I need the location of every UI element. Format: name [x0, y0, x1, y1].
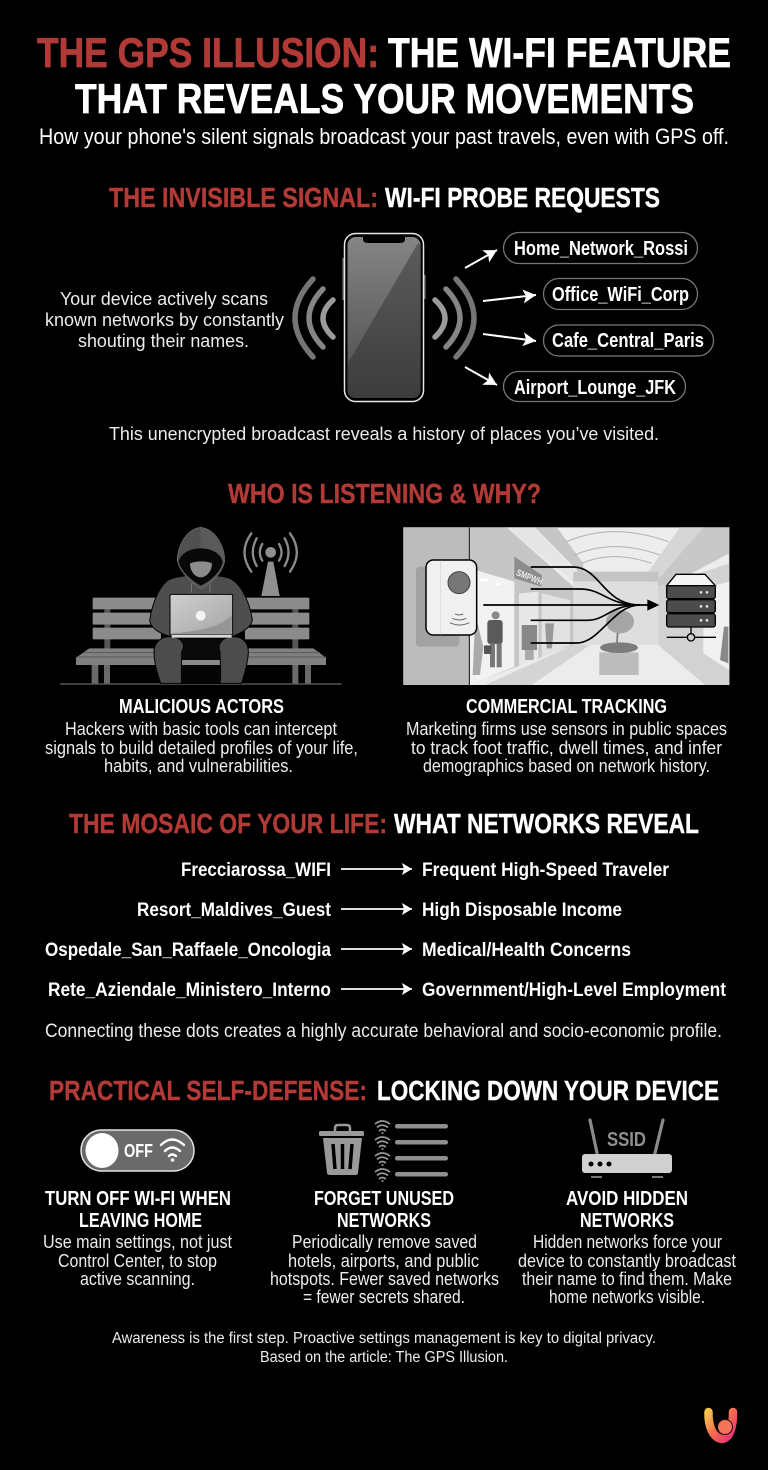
block: malicious actors: signals to build detailed profiles of your life,	[45, 738, 358, 758]
block: turn off wi-fi: Control Center, to stop	[58, 1251, 217, 1271]
pill: Airport_Lounge_JFK	[504, 372, 686, 402]
heading: who is listening: WHO IS LISTENING & WHY?	[228, 478, 541, 509]
block: forget unused networks: FORGET UNUSED	[314, 1188, 454, 1210]
footer	[112, 1330, 656, 1366]
block: commercial tracking: demographics based on network history.	[423, 756, 710, 776]
icon: smartphone	[342, 234, 426, 402]
heading: the invisible signal: WI-FI PROBE REQUESTS	[385, 182, 660, 213]
arrow: to Airport_Lounge_JFK	[465, 367, 497, 385]
row: Rete Aziendale mapping: Government/High-Level Employment	[422, 980, 727, 1001]
icon: signal waves right	[435, 279, 474, 357]
block: avoid hidden networks: Hidden networks force your	[533, 1232, 722, 1252]
title	[37, 29, 731, 122]
pill: Cafe_Central_Paris: Cafe_Central_Paris	[552, 330, 704, 352]
row: Ospedale mapping: Medical/Health Concerns	[422, 940, 631, 961]
block: malicious actors: habits, and vulnerabilities.	[104, 756, 293, 776]
block: turn off wi-fi: Use main settings, not just	[43, 1232, 232, 1252]
row: Rete Aziendale mapping	[48, 980, 727, 1001]
arrow: to Office_WiFi_Corp	[483, 295, 536, 301]
text: unencrypted broadcast note: This unencrypted broadcast reveals a history of places you’ve visited.	[109, 424, 659, 444]
block: turn off wi-fi	[43, 1188, 232, 1289]
pill: Office_WiFi_Corp: Office_WiFi_Corp	[552, 284, 689, 306]
row: Frecciarossa mapping: Frequent High-Speed Traveler	[422, 860, 670, 881]
row: Ospedale mapping	[45, 940, 631, 961]
pill: Office_WiFi_Corp	[544, 278, 698, 310]
pill: Airport_Lounge_JFK: Airport_Lounge_JFK	[514, 377, 676, 399]
block: malicious actors: Hackers with basic tools can intercept	[65, 719, 337, 739]
icon: trash can with network list	[319, 1121, 448, 1182]
block: forget unused networks: NETWORKS	[337, 1210, 431, 1232]
title: THE GPS ILLUSION:	[37, 29, 379, 76]
block: avoid hidden networks: home networks visible.	[549, 1287, 705, 1307]
text: device scanning description: known networks by constantly	[45, 310, 284, 330]
arrow: to Cafe_Central_Paris	[483, 334, 536, 341]
icon: router with SSID	[582, 1120, 672, 1178]
illustration: hacker on bench	[60, 527, 342, 684]
text: connecting the dots: Connecting these dots creates a highly accurate behavioral and socio-economic profile.	[45, 1021, 722, 1042]
row: Resort mapping: High Disposable Income	[422, 900, 622, 921]
block: commercial tracking: to track foot traffic, dwell times, and infer	[411, 738, 722, 758]
block: forget unused networks: hotspots. Fewer saved networks	[270, 1269, 499, 1289]
block: avoid hidden networks	[518, 1188, 736, 1307]
arrow: to Home_Network_Rossi	[465, 250, 497, 268]
heading: the invisible signal	[109, 182, 660, 213]
heading: mosaic of your life: WHAT NETWORKS REVEAL	[394, 808, 699, 839]
heading: practical self-defense: PRACTICAL SELF-DEFENSE:	[49, 1075, 367, 1106]
block: commercial tracking: COMMERCIAL TRACKING	[466, 696, 667, 718]
block: forget unused networks: Periodically remove saved	[292, 1232, 477, 1252]
row: Frecciarossa mapping	[181, 860, 670, 881]
heading: mosaic of your life: THE MOSAIC OF YOUR LIFE:	[69, 808, 387, 839]
icon: logo	[708, 1412, 733, 1439]
icon: wi-fi off toggle	[81, 1130, 194, 1171]
block: commercial tracking	[406, 696, 727, 776]
icon: wi-fi off toggle: OFF	[124, 1141, 153, 1161]
block: forget unused networks	[270, 1188, 499, 1307]
icon: router with SSID: SSID	[607, 1129, 646, 1151]
pill: Cafe_Central_Paris	[544, 325, 714, 356]
heading: the invisible signal: THE INVISIBLE SIGNAL:	[109, 182, 378, 213]
block: turn off wi-fi: active scanning.	[80, 1269, 195, 1289]
block: malicious actors: MALICIOUS ACTORS	[119, 696, 284, 718]
text: device scanning description: shouting their names.	[78, 331, 249, 351]
illustration: mall sensor tracking	[403, 527, 729, 685]
row: Resort mapping	[137, 900, 622, 921]
block: avoid hidden networks: their name to find them. Make	[522, 1269, 732, 1289]
block: forget unused networks: = fewer secrets shared.	[303, 1287, 465, 1307]
row: Resort mapping: Resort_Maldives_Guest	[137, 900, 332, 921]
footer: Based on the article: The GPS Illusion.	[260, 1349, 508, 1366]
block: turn off wi-fi: TURN OFF WI-FI WHEN	[45, 1188, 231, 1210]
block: turn off wi-fi: LEAVING HOME	[79, 1210, 202, 1232]
row: Rete Aziendale mapping: Rete_Aziendale_Ministero_Interno	[48, 980, 331, 1001]
block: forget unused networks: hotels, airports, and public	[288, 1251, 479, 1271]
heading: practical self-defense	[49, 1075, 719, 1106]
pill: Home_Network_Rossi	[504, 232, 698, 264]
block: commercial tracking: Marketing firms use sensors in public spaces	[406, 719, 727, 739]
illustration: mall sensor tracking: SMPWH	[515, 568, 544, 587]
row: Ospedale mapping: Ospedale_San_Raffaele_Oncologia	[45, 940, 331, 961]
heading: mosaic of your life	[69, 808, 699, 839]
block: avoid hidden networks: device to constantly broadcast	[518, 1251, 736, 1271]
footer: Awareness is the first step. Proactive settings management is key to digital privacy.	[112, 1330, 656, 1347]
pill: Home_Network_Rossi: Home_Network_Rossi	[514, 238, 688, 260]
row: Frecciarossa mapping: Frecciarossa_WIFI	[181, 860, 331, 881]
text: device scanning description: Your device actively scans	[60, 289, 268, 309]
block: avoid hidden networks: NETWORKS	[580, 1210, 674, 1232]
block: malicious actors	[45, 696, 358, 776]
block: avoid hidden networks: AVOID HIDDEN	[566, 1188, 688, 1210]
text: device scanning description	[45, 289, 284, 351]
icon: signal waves left	[295, 279, 333, 357]
